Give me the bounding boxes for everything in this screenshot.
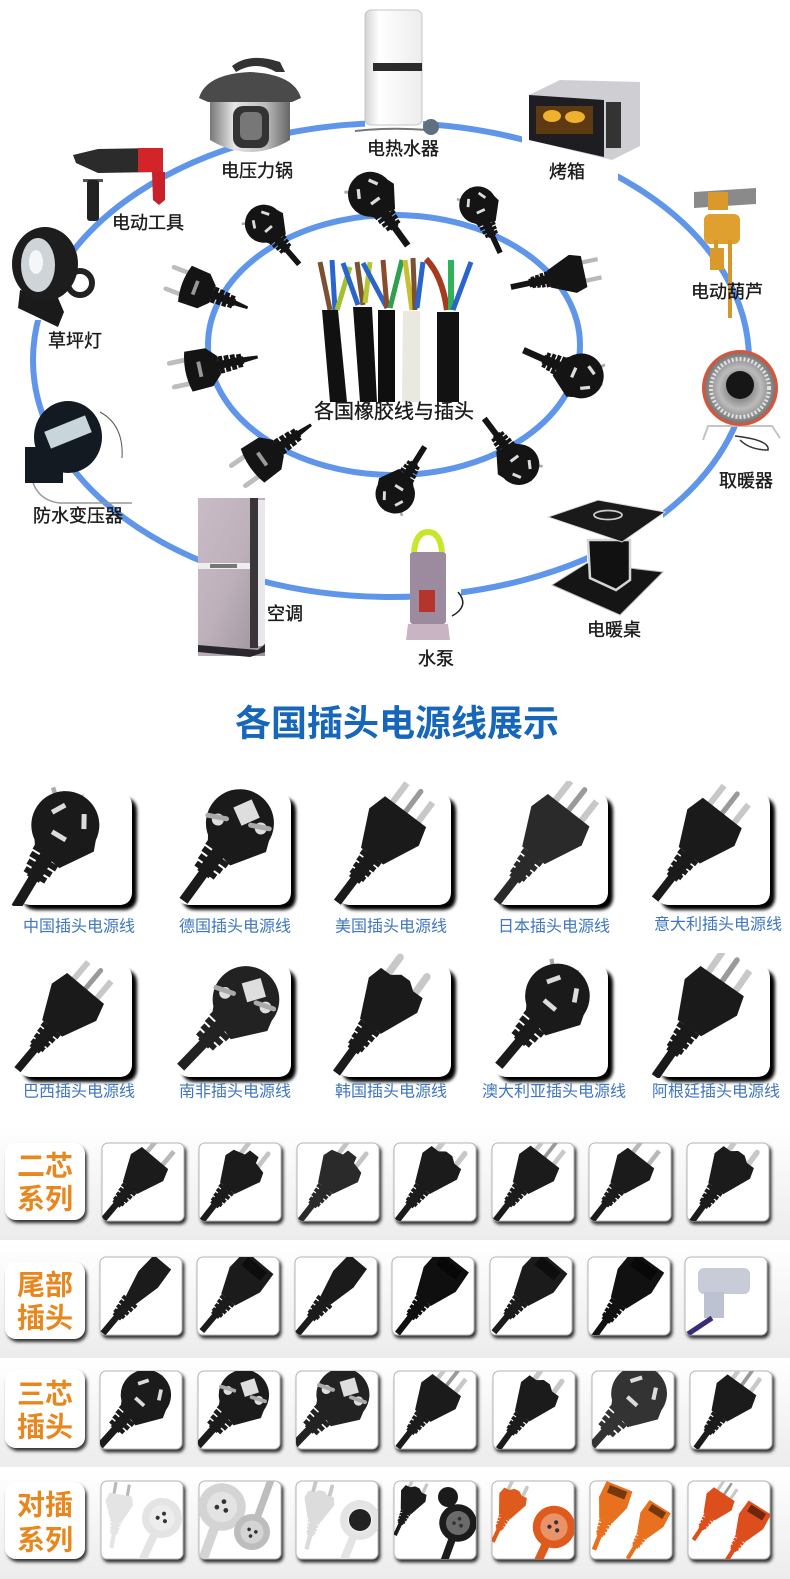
tile 3 (294, 1370, 384, 1456)
caption: 南非插头电源线 (179, 1082, 291, 1100)
series label: 系列 (17, 1184, 73, 1214)
series label (5, 1482, 85, 1559)
panel: application diagram (12, 10, 780, 669)
label: 取暖器 (719, 471, 773, 491)
inner ring of plugs (208, 215, 580, 475)
tile 7 (681, 1475, 772, 1570)
card: Japan (494, 781, 616, 913)
caption: 澳大利亚插头电源线 (482, 1082, 626, 1100)
icon: lawn lamp (12, 227, 92, 327)
icon: water pump (406, 532, 463, 640)
plug 6 (366, 435, 441, 521)
caption: 中国插头电源线 (23, 918, 135, 936)
label: 水泵 (418, 649, 454, 669)
tile 6 (590, 1370, 680, 1456)
tile 7 (685, 1257, 767, 1335)
icon: electric drill (73, 148, 165, 221)
series label: 三芯 (17, 1378, 73, 1410)
cable jackets (322, 307, 459, 402)
icon: rubber cables (320, 258, 471, 402)
icon: oven (529, 80, 640, 160)
label: 防水变压器 (33, 506, 123, 526)
tile 5 (490, 1142, 580, 1228)
caption: 阿根廷插头电源线 (652, 1082, 780, 1100)
series label (5, 1262, 85, 1339)
tile 6 (586, 1256, 676, 1342)
panel: country plug cards (0, 768, 782, 1100)
caption: 巴西插头电源线 (23, 1082, 135, 1100)
panel: paired connector series (4, 1480, 776, 1566)
icon: water heater (355, 10, 439, 135)
icon: heater (702, 350, 780, 450)
plugs around inner ring (161, 161, 611, 521)
caption: 日本插头电源线 (498, 918, 610, 936)
plug 7 (225, 408, 323, 494)
tile 3 (294, 1480, 384, 1566)
label: 电动工具 (112, 213, 184, 233)
plug 4 (513, 330, 611, 408)
label: 空调 (267, 604, 303, 624)
label: 电压力锅 (221, 161, 293, 181)
tile 4 (392, 1370, 482, 1456)
icon: heated table (548, 500, 665, 615)
ring gaps behind appliances (14, 100, 663, 610)
card: USA (334, 781, 459, 913)
plug 9 (161, 259, 255, 326)
tile 4 (392, 1480, 482, 1566)
card: Korea (333, 954, 459, 1085)
title: 各国插头电源线展示 (235, 702, 559, 744)
icon: air conditioner (198, 498, 265, 657)
series label: 对插 (17, 1490, 73, 1520)
series label: 系列 (17, 1524, 73, 1556)
card: Brazil (14, 960, 140, 1085)
series label: 尾部 (17, 1270, 73, 1300)
tile 5 (492, 1370, 580, 1456)
tile 2 (196, 1256, 284, 1342)
coloured wires (320, 258, 471, 310)
background bands (0, 1125, 790, 1579)
card: Germany (180, 789, 299, 913)
appliance labels (33, 139, 773, 669)
caption: 美国插头电源线 (335, 918, 447, 936)
tile 5 (480, 1476, 582, 1579)
icon: pressure cooker (199, 58, 301, 152)
plug 8 (165, 337, 262, 396)
tile 7 (686, 1142, 774, 1228)
label: 电热水器 (367, 139, 439, 159)
card: Australia (495, 958, 616, 1085)
tile 1 (100, 1480, 188, 1566)
card: China (12, 786, 140, 913)
plug 5 (466, 406, 548, 495)
tile 3 (296, 1142, 384, 1228)
label: 草坪灯 (48, 331, 102, 351)
icon: electric hoist (694, 188, 756, 318)
series label (5, 1143, 85, 1220)
panel: two-core series (4, 1142, 774, 1228)
series label: 插头 (17, 1412, 73, 1442)
tile 2 (198, 1480, 286, 1566)
plug 1 (339, 161, 428, 259)
tile 5 (488, 1256, 578, 1342)
card: South Africa (177, 966, 299, 1085)
tile 1 (98, 1370, 188, 1456)
tile 2 (196, 1370, 286, 1456)
series label: 二芯 (17, 1150, 73, 1182)
tile 6 (588, 1142, 676, 1228)
caption: 韩国插头电源线 (335, 1082, 447, 1100)
label: 电动葫芦 (691, 282, 763, 302)
tile 1 (93, 1254, 182, 1342)
caption: 德国插头电源线 (179, 918, 291, 936)
tile 7 (688, 1370, 778, 1456)
plug 3 (507, 249, 604, 306)
tile 6 (580, 1481, 672, 1566)
card: Argentina (652, 953, 778, 1085)
label: 各国橡胶线与插头 (314, 400, 474, 423)
tile 4 (390, 1256, 480, 1342)
plug 2 (453, 179, 519, 261)
series label: 插头 (17, 1302, 73, 1334)
series label (5, 1369, 85, 1448)
tile 4 (392, 1142, 482, 1228)
tile 1 (100, 1142, 190, 1228)
card: Italy (652, 784, 778, 913)
plug 10 (237, 195, 315, 277)
outer ring of appliances (33, 123, 749, 597)
tile 2 (198, 1142, 286, 1228)
icon: waterproof transformer (25, 401, 132, 503)
label: 烤箱 (549, 162, 585, 182)
label: 电暖桌 (587, 620, 641, 640)
tile 3 (287, 1253, 377, 1343)
caption: 意大利插头电源线 (654, 914, 782, 934)
panel: three-core series (4, 1370, 778, 1456)
panel: tail connector series (4, 1256, 772, 1345)
